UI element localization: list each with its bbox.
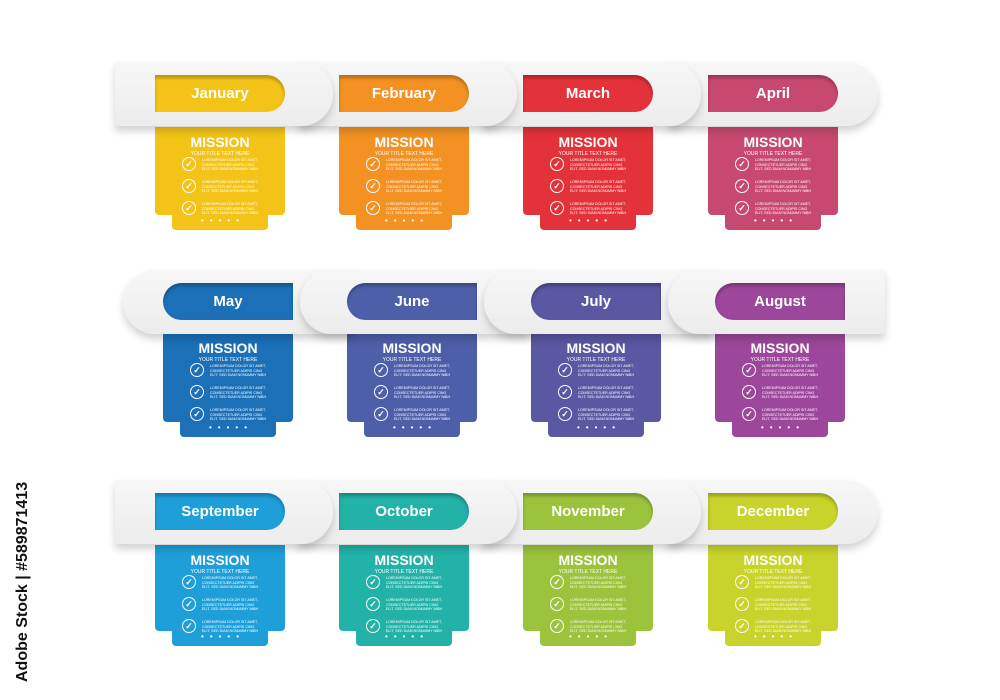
- card: May: CONSECTETUER ADIPIS CING: [210, 412, 262, 416]
- card: December: CONSECTETUER ADIPIS CING: [755, 602, 807, 606]
- card: December: YOUR TITLE TEXT HERE: [744, 569, 802, 575]
- card: January: YOUR TITLE TEXT HERE: [191, 151, 249, 157]
- tab: December: [708, 493, 838, 530]
- card: March: LOREMIPSUM DOLOR SIT AMET,: [570, 158, 626, 162]
- card: August: CONSECTETUER ADIPIS CING: [762, 390, 814, 394]
- card: February: ELIT, SED DIAM NONUMMY NIBH: [386, 189, 442, 193]
- card: February: LOREMIPSUM DOLOR SIT AMET,: [386, 180, 442, 184]
- card: September: ELIT, SED DIAM NONUMMY NIBH: [202, 585, 258, 589]
- tab: January: [155, 75, 285, 112]
- card: February: ✓: [369, 181, 377, 191]
- card: June: •••••: [393, 423, 437, 432]
- card: July: MISSION: [566, 340, 626, 356]
- card: July: •••••: [577, 423, 621, 432]
- card: May: CONSECTETUER ADIPIS CING: [210, 368, 262, 372]
- card: June: ELIT, SED DIAM NONUMMY NIBH: [394, 373, 450, 377]
- tab: September: September: [181, 503, 259, 520]
- card: July: LOREMIPSUM DOLOR SIT AMET,: [578, 386, 634, 390]
- card: January: •••••: [201, 216, 245, 225]
- card: July: ✓: [561, 409, 569, 419]
- card: November: ✓: [553, 621, 561, 631]
- card: April: CONSECTETUER ADIPIS CING: [755, 162, 807, 166]
- tab: October: October: [375, 503, 433, 520]
- card: April: ✓: [738, 159, 746, 169]
- tab: November: [523, 493, 653, 530]
- tab: June: June: [394, 293, 430, 310]
- band row 2: [120, 270, 888, 344]
- card: March: ELIT, SED DIAM NONUMMY NIBH: [570, 167, 626, 171]
- card: January: CONSECTETUER ADIPIS CING: [202, 206, 254, 210]
- card: November: ✓: [553, 577, 561, 587]
- card: November: [523, 545, 653, 646]
- tab: April: April: [756, 85, 790, 102]
- card: April: ✓: [738, 203, 746, 213]
- card: March: ELIT, SED DIAM NONUMMY NIBH: [570, 211, 626, 215]
- tab: May: May: [213, 293, 243, 310]
- card: January: ✓: [185, 159, 193, 169]
- card: August: ELIT, SED DIAM NONUMMY NIBH: [762, 373, 818, 377]
- card: July: YOUR TITLE TEXT HERE: [567, 357, 625, 363]
- card: January: LOREMIPSUM DOLOR SIT AMET,: [202, 180, 258, 184]
- card: October: ELIT, SED DIAM NONUMMY NIBH: [386, 585, 442, 589]
- card: June: [347, 334, 477, 437]
- card: November: CONSECTETUER ADIPIS CING: [570, 602, 622, 606]
- card: December: CONSECTETUER ADIPIS CING: [755, 624, 807, 628]
- card: October: ✓: [369, 599, 377, 609]
- card: May: •••••: [209, 423, 253, 432]
- card: December: ✓: [738, 599, 746, 609]
- card: May: ELIT, SED DIAM NONUMMY NIBH: [210, 417, 266, 421]
- card: March: ✓: [553, 181, 561, 191]
- card: June: LOREMIPSUM DOLOR SIT AMET,: [394, 364, 450, 368]
- card: September: [155, 545, 285, 646]
- card: October: CONSECTETUER ADIPIS CING: [386, 602, 438, 606]
- card: February: CONSECTETUER ADIPIS CING: [386, 184, 438, 188]
- card: March: ELIT, SED DIAM NONUMMY NIBH: [570, 189, 626, 193]
- card: May: ELIT, SED DIAM NONUMMY NIBH: [210, 373, 266, 377]
- card: December: ✓: [738, 577, 746, 587]
- card: September: LOREMIPSUM DOLOR SIT AMET,: [202, 598, 258, 602]
- card: February: ✓: [369, 159, 377, 169]
- card: October: ELIT, SED DIAM NONUMMY NIBH: [386, 629, 442, 633]
- card: December: ELIT, SED DIAM NONUMMY NIBH: [755, 607, 811, 611]
- card: June: LOREMIPSUM DOLOR SIT AMET,: [394, 386, 450, 390]
- card: January: MISSION: [190, 134, 250, 150]
- card: October: •••••: [385, 632, 429, 641]
- card: June: CONSECTETUER ADIPIS CING: [394, 412, 446, 416]
- card: March: CONSECTETUER ADIPIS CING: [570, 206, 622, 210]
- card: January: ✓: [185, 181, 193, 191]
- card: October: ELIT, SED DIAM NONUMMY NIBH: [386, 607, 442, 611]
- card: November: ELIT, SED DIAM NONUMMY NIBH: [570, 629, 626, 633]
- card: October: ✓: [369, 577, 377, 587]
- band row 1: [112, 62, 881, 136]
- card: June: ELIT, SED DIAM NONUMMY NIBH: [394, 417, 450, 421]
- card: August: MISSION: [750, 340, 810, 356]
- card: April: •••••: [754, 216, 798, 225]
- card: October: [339, 545, 469, 646]
- card: July: ✓: [561, 365, 569, 375]
- card: November: CONSECTETUER ADIPIS CING: [570, 580, 622, 584]
- tab: November: November: [551, 503, 625, 520]
- card: August: ELIT, SED DIAM NONUMMY NIBH: [762, 395, 818, 399]
- card: September: ✓: [185, 577, 193, 587]
- card: September: CONSECTETUER ADIPIS CING: [202, 580, 254, 584]
- card: June: ELIT, SED DIAM NONUMMY NIBH: [394, 395, 450, 399]
- card: February: LOREMIPSUM DOLOR SIT AMET,: [386, 158, 442, 162]
- card: May: CONSECTETUER ADIPIS CING: [210, 390, 262, 394]
- card: June: ✓: [377, 387, 385, 397]
- card: August: ✓: [745, 409, 753, 419]
- tab: February: February: [372, 85, 436, 102]
- tab: August: August: [754, 293, 806, 310]
- tab: July: July: [581, 293, 611, 310]
- tab: May: [163, 283, 293, 320]
- card: November: ELIT, SED DIAM NONUMMY NIBH: [570, 585, 626, 589]
- card: March: CONSECTETUER ADIPIS CING: [570, 184, 622, 188]
- card: June: CONSECTETUER ADIPIS CING: [394, 368, 446, 372]
- card: October: LOREMIPSUM DOLOR SIT AMET,: [386, 620, 442, 624]
- card: June: ✓: [377, 409, 385, 419]
- card: February: ELIT, SED DIAM NONUMMY NIBH: [386, 167, 442, 171]
- card: February: [339, 127, 469, 230]
- card: December: CONSECTETUER ADIPIS CING: [755, 580, 807, 584]
- card: October: LOREMIPSUM DOLOR SIT AMET,: [386, 576, 442, 580]
- card: December: [708, 545, 838, 646]
- card: August: CONSECTETUER ADIPIS CING: [762, 368, 814, 372]
- card: May: ELIT, SED DIAM NONUMMY NIBH: [210, 395, 266, 399]
- card: July: CONSECTETUER ADIPIS CING: [578, 390, 630, 394]
- card: March: •••••: [569, 216, 613, 225]
- card: November: LOREMIPSUM DOLOR SIT AMET,: [570, 598, 626, 602]
- card: April: [708, 127, 838, 230]
- tab: March: [523, 75, 653, 112]
- card: November: LOREMIPSUM DOLOR SIT AMET,: [570, 576, 626, 580]
- card: December: •••••: [754, 632, 798, 641]
- card: May: ✓: [193, 387, 201, 397]
- card: October: YOUR TITLE TEXT HERE: [375, 569, 433, 575]
- card: March: ✓: [553, 159, 561, 169]
- tab: August: [715, 283, 845, 320]
- card: February: MISSION: [374, 134, 434, 150]
- card: November: •••••: [569, 632, 613, 641]
- card: July: ELIT, SED DIAM NONUMMY NIBH: [578, 417, 634, 421]
- card: March: [523, 127, 653, 230]
- card: July: LOREMIPSUM DOLOR SIT AMET,: [578, 364, 634, 368]
- card: September: ELIT, SED DIAM NONUMMY NIBH: [202, 607, 258, 611]
- card: July: CONSECTETUER ADIPIS CING: [578, 368, 630, 372]
- card: May: MISSION: [198, 340, 258, 356]
- card: September: MISSION: [190, 552, 250, 568]
- card: November: ✓: [553, 599, 561, 609]
- card: April: LOREMIPSUM DOLOR SIT AMET,: [755, 180, 811, 184]
- card: December: MISSION: [743, 552, 803, 568]
- card: September: CONSECTETUER ADIPIS CING: [202, 602, 254, 606]
- card: July: ELIT, SED DIAM NONUMMY NIBH: [578, 373, 634, 377]
- card: January: ✓: [185, 203, 193, 213]
- card: January: [155, 127, 285, 230]
- card: August: ✓: [745, 387, 753, 397]
- tab: April: [708, 75, 838, 112]
- card: June: ✓: [377, 365, 385, 375]
- card: September: CONSECTETUER ADIPIS CING: [202, 624, 254, 628]
- card: October: ✓: [369, 621, 377, 631]
- tab: December: December: [737, 503, 809, 520]
- watermark text: Adobe Stock | #589871413: [14, 482, 31, 682]
- card: June: MISSION: [382, 340, 442, 356]
- card: April: ELIT, SED DIAM NONUMMY NIBH: [755, 189, 811, 193]
- card: November: MISSION: [558, 552, 618, 568]
- tab: July: [531, 283, 661, 320]
- card: February: •••••: [385, 216, 429, 225]
- card: November: YOUR TITLE TEXT HERE: [559, 569, 617, 575]
- card: August: LOREMIPSUM DOLOR SIT AMET,: [762, 364, 818, 368]
- card: August: YOUR TITLE TEXT HERE: [751, 357, 809, 363]
- card: December: LOREMIPSUM DOLOR SIT AMET,: [755, 598, 811, 602]
- card: September: ✓: [185, 599, 193, 609]
- card: September: YOUR TITLE TEXT HERE: [191, 569, 249, 575]
- band row 3: [112, 480, 881, 554]
- card: March: CONSECTETUER ADIPIS CING: [570, 162, 622, 166]
- card: March: LOREMIPSUM DOLOR SIT AMET,: [570, 180, 626, 184]
- card: February: CONSECTETUER ADIPIS CING: [386, 162, 438, 166]
- card: October: CONSECTETUER ADIPIS CING: [386, 580, 438, 584]
- card: December: ✓: [738, 621, 746, 631]
- card: September: ELIT, SED DIAM NONUMMY NIBH: [202, 629, 258, 633]
- card: May: ✓: [193, 365, 201, 375]
- card: June: YOUR TITLE TEXT HERE: [383, 357, 441, 363]
- card: April: LOREMIPSUM DOLOR SIT AMET,: [755, 202, 811, 206]
- tab: January: January: [191, 85, 249, 102]
- card: August: ✓: [745, 365, 753, 375]
- card: July: [531, 334, 661, 437]
- card: December: LOREMIPSUM DOLOR SIT AMET,: [755, 620, 811, 624]
- card: February: ✓: [369, 203, 377, 213]
- card: March: YOUR TITLE TEXT HERE: [559, 151, 617, 157]
- card: August: •••••: [761, 423, 805, 432]
- card: September: LOREMIPSUM DOLOR SIT AMET,: [202, 576, 258, 580]
- card: January: ELIT, SED DIAM NONUMMY NIBH: [202, 189, 258, 193]
- card: July: ✓: [561, 387, 569, 397]
- card: November: CONSECTETUER ADIPIS CING: [570, 624, 622, 628]
- card: January: CONSECTETUER ADIPIS CING: [202, 162, 254, 166]
- card: May: ✓: [193, 409, 201, 419]
- card: May: LOREMIPSUM DOLOR SIT AMET,: [210, 386, 266, 390]
- card: July: ELIT, SED DIAM NONUMMY NIBH: [578, 395, 634, 399]
- card: May: YOUR TITLE TEXT HERE: [199, 357, 257, 363]
- card: April: ELIT, SED DIAM NONUMMY NIBH: [755, 167, 811, 171]
- card: May: [163, 334, 293, 437]
- card: May: LOREMIPSUM DOLOR SIT AMET,: [210, 408, 266, 412]
- tab: February: [339, 75, 469, 112]
- card: August: [715, 334, 845, 437]
- card: September: •••••: [201, 632, 245, 641]
- card: January: ELIT, SED DIAM NONUMMY NIBH: [202, 211, 258, 215]
- card: January: LOREMIPSUM DOLOR SIT AMET,: [202, 202, 258, 206]
- card: April: YOUR TITLE TEXT HERE: [744, 151, 802, 157]
- tab: October: [339, 493, 469, 530]
- card: August: LOREMIPSUM DOLOR SIT AMET,: [762, 386, 818, 390]
- card: November: LOREMIPSUM DOLOR SIT AMET,: [570, 620, 626, 624]
- card: October: LOREMIPSUM DOLOR SIT AMET,: [386, 598, 442, 602]
- card: December: LOREMIPSUM DOLOR SIT AMET,: [755, 576, 811, 580]
- card: March: MISSION: [558, 134, 618, 150]
- tab: June: [347, 283, 477, 320]
- card: September: ✓: [185, 621, 193, 631]
- card: August: CONSECTETUER ADIPIS CING: [762, 412, 814, 416]
- card: May: LOREMIPSUM DOLOR SIT AMET,: [210, 364, 266, 368]
- card: March: LOREMIPSUM DOLOR SIT AMET,: [570, 202, 626, 206]
- card: April: MISSION: [743, 134, 803, 150]
- card: January: LOREMIPSUM DOLOR SIT AMET,: [202, 158, 258, 162]
- card: February: CONSECTETUER ADIPIS CING: [386, 206, 438, 210]
- card: February: LOREMIPSUM DOLOR SIT AMET,: [386, 202, 442, 206]
- card: July: LOREMIPSUM DOLOR SIT AMET,: [578, 408, 634, 412]
- card: November: ELIT, SED DIAM NONUMMY NIBH: [570, 607, 626, 611]
- card: January: CONSECTETUER ADIPIS CING: [202, 184, 254, 188]
- card: June: LOREMIPSUM DOLOR SIT AMET,: [394, 408, 450, 412]
- card: February: ELIT, SED DIAM NONUMMY NIBH: [386, 211, 442, 215]
- card: September: LOREMIPSUM DOLOR SIT AMET,: [202, 620, 258, 624]
- card: August: ELIT, SED DIAM NONUMMY NIBH: [762, 417, 818, 421]
- card: December: ELIT, SED DIAM NONUMMY NIBH: [755, 629, 811, 633]
- tab: March: March: [566, 85, 610, 102]
- card: October: CONSECTETUER ADIPIS CING: [386, 624, 438, 628]
- tab: September: [155, 493, 285, 530]
- card: July: CONSECTETUER ADIPIS CING: [578, 412, 630, 416]
- card: April: ✓: [738, 181, 746, 191]
- card: January: ELIT, SED DIAM NONUMMY NIBH: [202, 167, 258, 171]
- card: February: YOUR TITLE TEXT HERE: [375, 151, 433, 157]
- card: December: ELIT, SED DIAM NONUMMY NIBH: [755, 585, 811, 589]
- card: April: CONSECTETUER ADIPIS CING: [755, 184, 807, 188]
- card: October: MISSION: [374, 552, 434, 568]
- card: April: CONSECTETUER ADIPIS CING: [755, 206, 807, 210]
- card: March: ✓: [553, 203, 561, 213]
- card: April: ELIT, SED DIAM NONUMMY NIBH: [755, 211, 811, 215]
- card: April: LOREMIPSUM DOLOR SIT AMET,: [755, 158, 811, 162]
- card: August: LOREMIPSUM DOLOR SIT AMET,: [762, 408, 818, 412]
- card: June: CONSECTETUER ADIPIS CING: [394, 390, 446, 394]
